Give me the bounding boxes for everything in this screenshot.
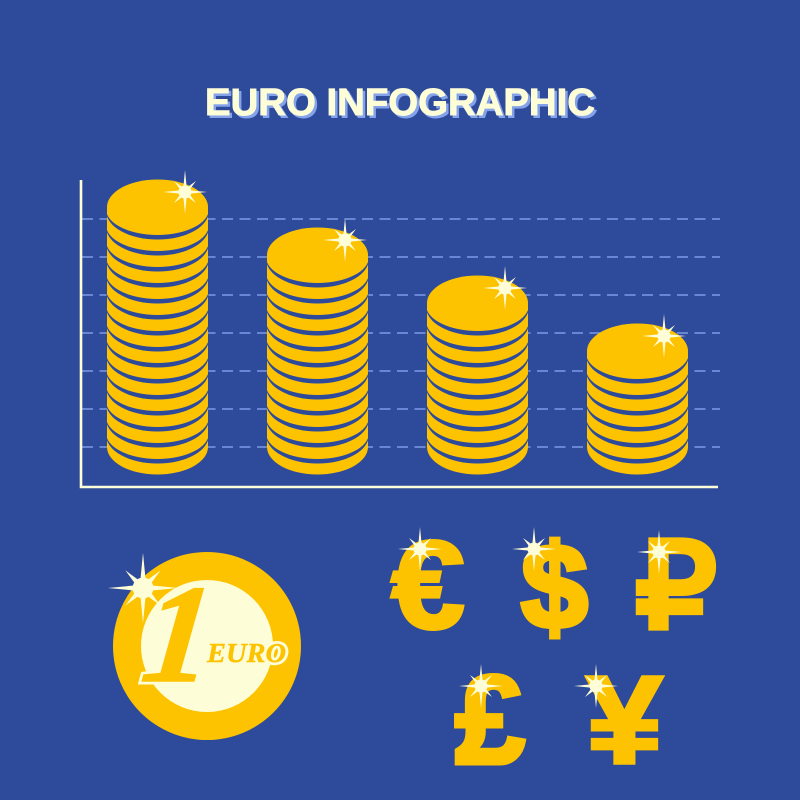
EURO label: EURO — [206, 638, 286, 668]
EURO label: EURO — [206, 638, 286, 668]
chart: coin stacks on dashed grid — [81, 170, 720, 487]
title: EURO INFOGRAPHIC — [205, 82, 595, 124]
coin stack 3 — [426, 276, 529, 474]
sparkles on coin stacks — [163, 170, 686, 358]
coin stack 4 — [586, 324, 689, 474]
numeral 1: 1 — [136, 557, 222, 712]
pound sign: £ — [455, 651, 525, 790]
ruble sign: ₽ — [635, 521, 717, 653]
one euro coin — [108, 552, 301, 740]
euro sign: € — [391, 515, 465, 655]
title: EURO INFOGRAPHIC — [208, 84, 598, 126]
dollar sign: $ — [521, 520, 588, 654]
coin stack 2 — [266, 228, 369, 474]
numeral 1: 1 — [136, 557, 222, 712]
coin sparkle — [108, 553, 178, 623]
yen sign: ¥ — [586, 650, 663, 790]
currency symbols — [391, 515, 717, 790]
coin stack 1 — [106, 180, 209, 474]
